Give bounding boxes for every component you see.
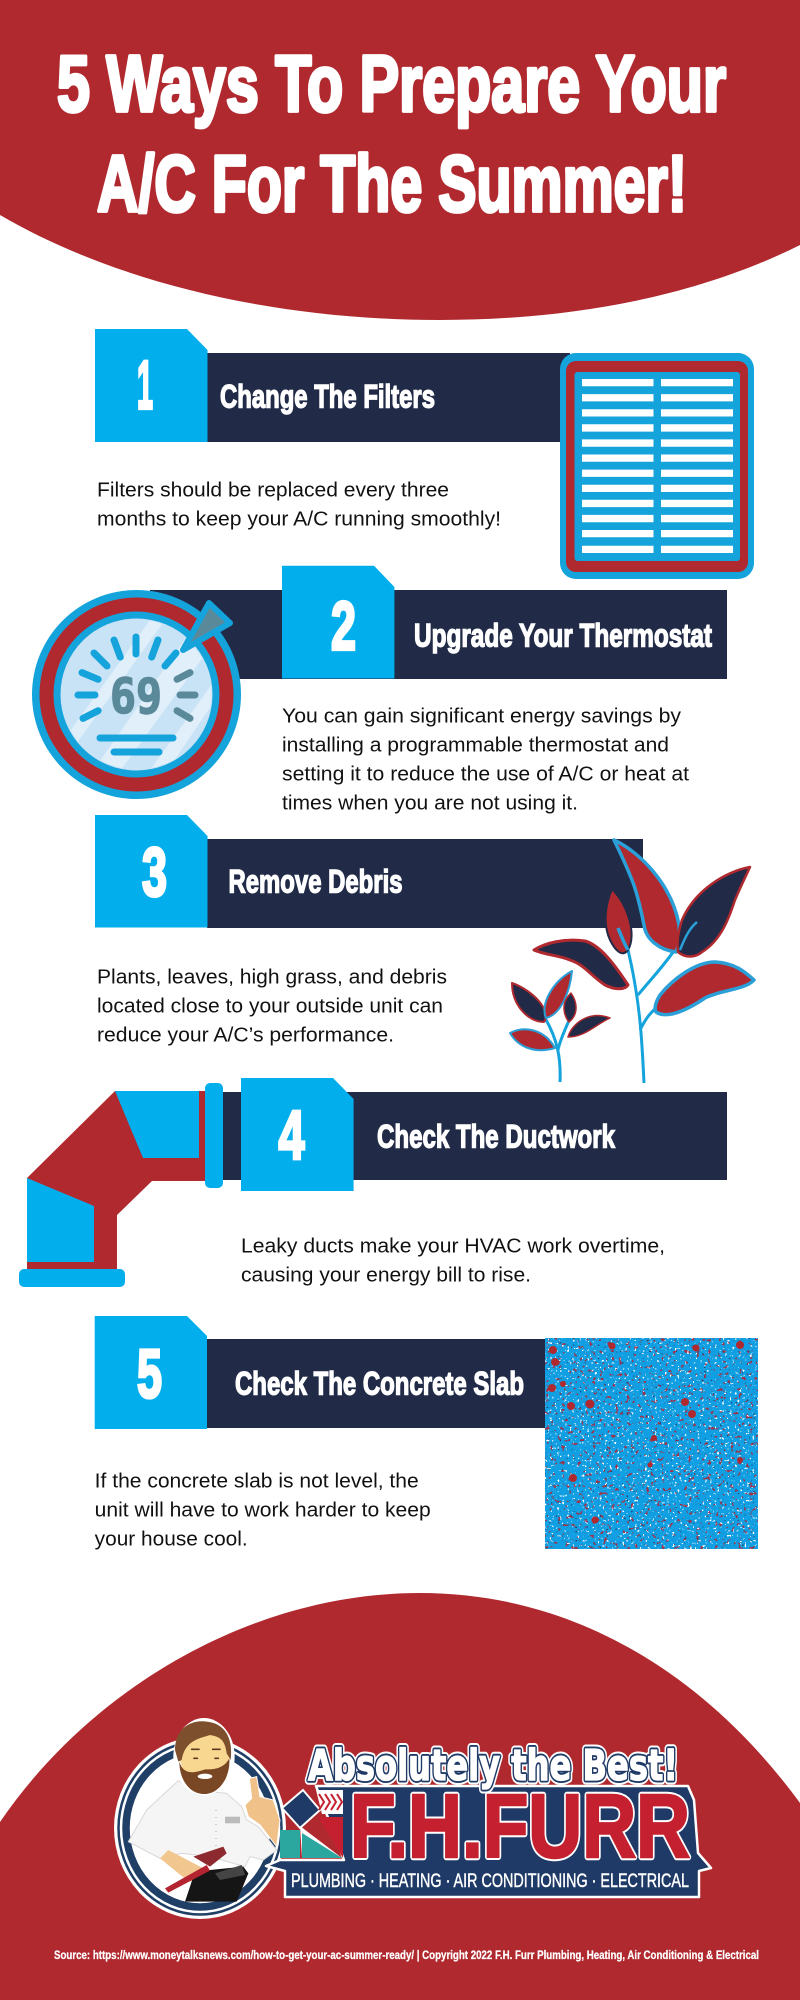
number 4: 4 [278, 1096, 304, 1174]
number 5: 5 [137, 1336, 162, 1412]
logo slogan: Absolutely the Best! [308, 1741, 678, 1791]
body text 1: months to keep your A/C running smoothly! [97, 508, 501, 530]
panel: step 4 check the ductwork [19, 1078, 727, 1287]
number tab 4 [241, 1078, 354, 1191]
body text 1: Filters should be replaced every three [97, 480, 449, 502]
icon: thermostat dial: 69 [110, 669, 162, 725]
body text 4 [241, 1236, 665, 1286]
heading: change the filters: Change The Filters [220, 378, 435, 414]
footer panel [0, 1593, 800, 2000]
logo slogan: Absolutely the Best! [308, 1741, 678, 1791]
logo icon: brush and triangles [280, 1790, 343, 1858]
body text 3 [97, 966, 447, 1046]
body text 5 [95, 1470, 431, 1550]
heading bar 1 [207, 353, 570, 442]
heading: check the ductwork: Check The Ductwork [377, 1118, 616, 1154]
mascot plumber [128, 1718, 280, 1902]
concrete speckle texture [545, 1338, 758, 1549]
body text 4: causing your energy bill to rise. [241, 1264, 531, 1286]
body text 5: If the concrete slab is not level, the [95, 1470, 419, 1492]
title [57, 39, 726, 228]
heading bar 3 [207, 839, 643, 928]
number tab 5 [95, 1316, 207, 1429]
body text 2 [282, 706, 689, 814]
heading bar 4 [223, 1092, 727, 1180]
body text 2: installing a programmable thermostat and [282, 734, 669, 756]
body text 2: times when you are not using it. [282, 792, 578, 814]
icon: plants [510, 840, 754, 1083]
logo badge circle [114, 1737, 286, 1919]
icon: thermostat dial [32, 590, 241, 799]
heading: check the concrete slab: Check The Concrete Slab [235, 1366, 524, 1402]
number 2: 2 [331, 588, 356, 664]
body text 5: your house cool. [95, 1528, 248, 1550]
body text 2: setting it to reduce the use of A/C or heat at [282, 764, 689, 786]
number tab 2 [282, 566, 394, 678]
body text 5: unit will have to work harder to keep [95, 1500, 431, 1522]
heading bar 5 [207, 1339, 546, 1428]
panel: step 3 remove debris [95, 815, 754, 1083]
panel: step 1 change the filters: 1 [137, 346, 153, 424]
logo wordmark: F.H.FURR [350, 1777, 690, 1877]
header banner [0, 0, 800, 320]
body text 1 [97, 480, 501, 530]
icon: duct elbow [19, 1083, 223, 1287]
panel: step 1 change the filters [95, 329, 754, 579]
logo: F.H. Furr [114, 1718, 711, 1919]
body text 4: Leaky ducts make your HVAC work overtime, [241, 1236, 665, 1258]
logo navy field [266, 1786, 711, 1897]
logo slogan: Absolutely the Best! [308, 1741, 678, 1791]
number tab 3 [95, 815, 208, 928]
icon: air filter [560, 353, 754, 579]
logo wordmark: F.H.FURR [350, 1777, 690, 1877]
panel: step 5 check the concrete slab [95, 1316, 758, 1550]
body text 3: reduce your A/C’s performance. [97, 1024, 394, 1046]
body text 3: Plants, leaves, high grass, and debris [97, 966, 447, 988]
heading bar 2 [150, 590, 727, 679]
panel: step 2 upgrade your thermostat [32, 566, 727, 814]
number 3: 3 [142, 834, 167, 910]
body text 3: located close to your outside unit can [97, 996, 443, 1018]
body text 2: You can gain significant energy savings by [282, 706, 681, 728]
number tab 1 [95, 329, 208, 442]
heading: remove debris: Remove Debris [228, 864, 402, 900]
heading: upgrade your thermostat: Upgrade Your Thermostat [414, 618, 712, 654]
